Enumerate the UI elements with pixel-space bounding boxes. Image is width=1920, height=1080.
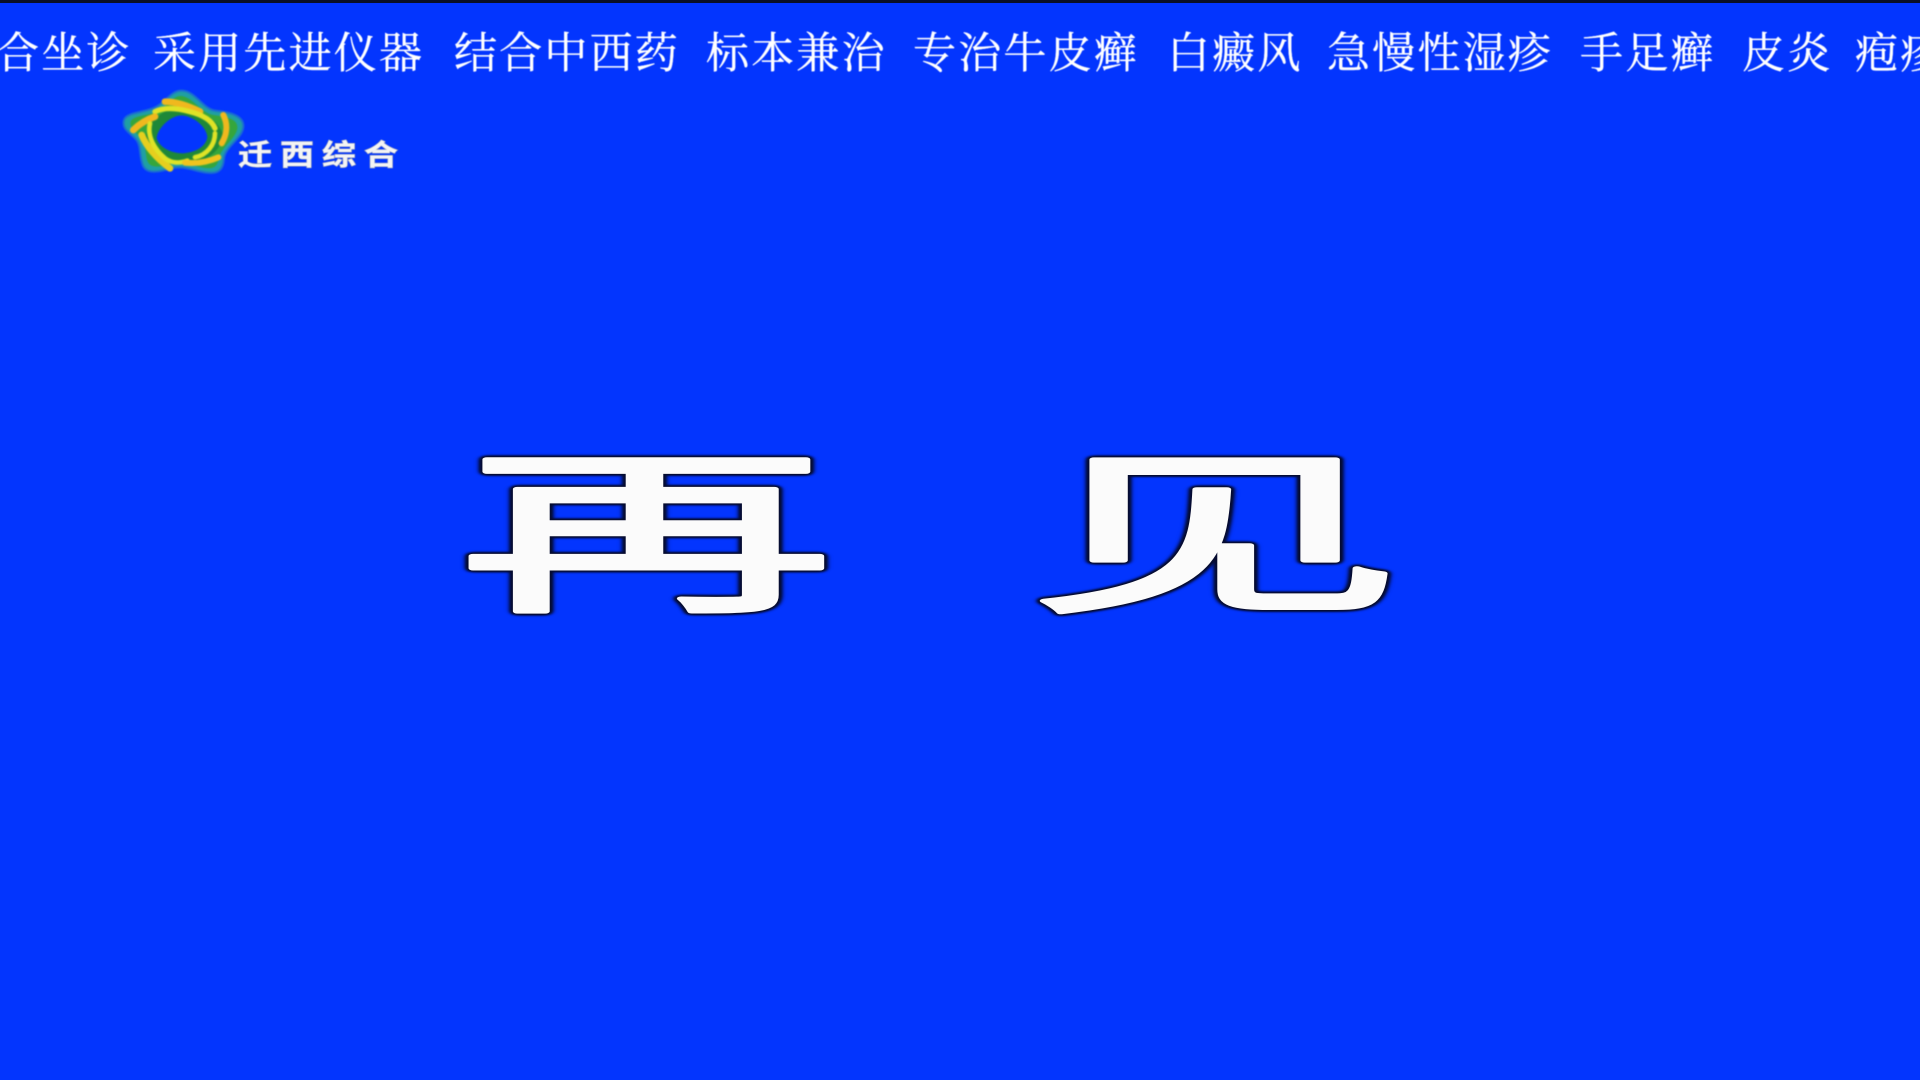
scrolling ticker text: 专治牛皮癣	[913, 31, 1139, 78]
scrolling ticker text: 合坐诊	[0, 30, 132, 78]
scrolling ticker text: 皮炎	[1742, 31, 1832, 78]
main title: 再见 (goodbye): 再	[458, 438, 834, 635]
main title: 再见 (goodbye): 见	[1027, 439, 1403, 636]
icon: five-point ring emblem	[124, 91, 243, 173]
scrolling ticker text: 白癜风	[1167, 31, 1303, 78]
scrolling ticker text: 标本兼治	[706, 31, 887, 78]
yellow swirl bands	[133, 102, 226, 168]
scrolling ticker text	[0, 30, 1920, 78]
logo wordmark: 迁西综合	[238, 138, 406, 171]
scrolling ticker text: 采用先进仪器	[153, 31, 424, 78]
scrolling ticker text: 结合中西药	[454, 31, 680, 78]
main title: 再见 (goodbye)	[458, 438, 1403, 636]
channel logo: Qianxi Zonghe	[124, 91, 406, 173]
scrolling ticker text: 急慢性湿疹	[1327, 31, 1553, 78]
scrolling ticker text: 手足癣	[1580, 31, 1716, 78]
